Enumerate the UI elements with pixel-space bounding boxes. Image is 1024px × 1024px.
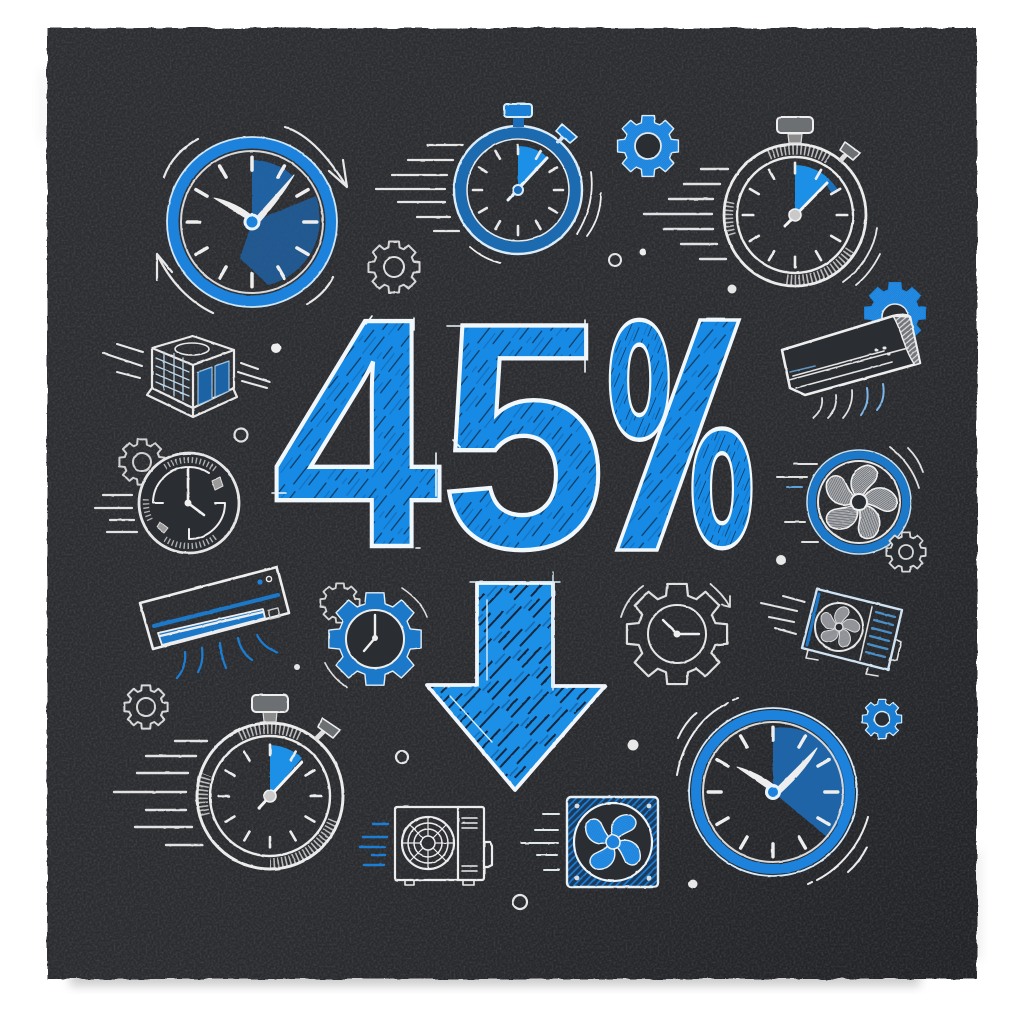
- sketch overshoot lines on the digits: [272, 316, 585, 548]
- percent sign: %: [605, 264, 756, 616]
- icon: stopwatch top right: [644, 117, 880, 286]
- decorative dots: [234, 248, 786, 909]
- icon: wall air conditioner right: [782, 283, 925, 418]
- icon: clock left with gear: [95, 439, 239, 553]
- icon: stopwatch bottom left: [114, 695, 343, 869]
- icon: small blue gear right: [862, 699, 902, 739]
- icon: blue gear top: [618, 116, 678, 176]
- icon: square blue fan: [521, 797, 658, 887]
- icon: outdoor unit upper left: [103, 336, 270, 417]
- icon: round fan right: [777, 447, 926, 572]
- paper shadow bottom: [70, 970, 920, 986]
- icon: outdoor unit bottom centre: [360, 807, 492, 885]
- icon artwork: [95, 104, 926, 909]
- big number 45%: [272, 250, 756, 616]
- icon: stopwatch top centre: [376, 104, 601, 263]
- digit 4: 4: [272, 250, 443, 615]
- icon: blue gear with clock: [320, 583, 427, 687]
- icon: outdoor fan unit right: [761, 589, 902, 676]
- icon: small white gear: [368, 241, 420, 293]
- percent slash thickening: [617, 320, 739, 550]
- arrow pointing down: [427, 572, 605, 790]
- paper shadow left: [40, 70, 48, 140]
- icon: small white gear left: [124, 685, 168, 729]
- digit 5: 5: [440, 256, 607, 615]
- icon: large clock top left: [157, 127, 347, 313]
- icon: wall air conditioner left: [140, 567, 289, 678]
- paper shadow right: [972, 850, 980, 960]
- icon: white gear with clock: [621, 584, 730, 684]
- icon: large clock bottom right: [677, 698, 868, 884]
